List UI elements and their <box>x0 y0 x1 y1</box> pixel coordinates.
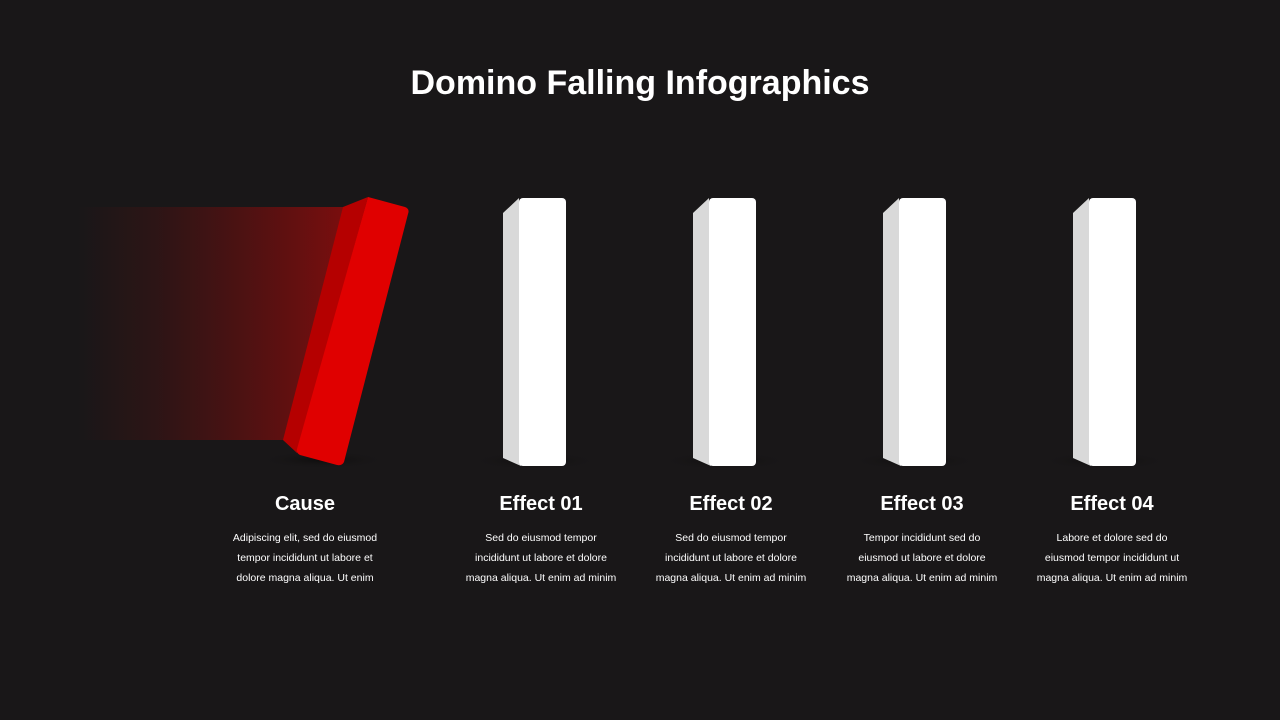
text: effect 02: Effect 02 <box>689 493 773 515</box>
text: effect 03: Effect 03 <box>880 493 964 515</box>
white domino 2 <box>660 198 790 470</box>
white domino 3 <box>850 198 980 470</box>
text: effect 04: Effect 04 <box>1070 493 1154 515</box>
text: effect 02 <box>656 493 806 584</box>
white domino 1 <box>470 198 600 470</box>
red falling domino <box>78 197 409 469</box>
text: effect 01 <box>466 493 616 584</box>
text: effect 02: magna aliqua. Ut enim ad minim <box>656 572 806 584</box>
text: cause: Cause <box>275 493 335 515</box>
text: effect 04 <box>1037 493 1187 584</box>
text: effect 01: Effect 01 <box>499 493 583 515</box>
text: cause: tempor incididunt ut labore et <box>237 552 373 564</box>
text: effect 02: incididunt ut labore et dolore <box>665 552 797 564</box>
text: effect 01: incididunt ut labore et dolore <box>475 552 607 564</box>
text: cause <box>232 493 377 584</box>
text: cause: dolore magna aliqua. Ut enim <box>236 572 374 584</box>
text: effect 03 <box>847 493 997 584</box>
text: effect 04: Labore et dolore sed do <box>1057 532 1167 544</box>
text: effect 01: Sed do eiusmod tempor <box>485 532 597 544</box>
text: effect 03: eiusmod ut labore et dolore <box>858 552 986 564</box>
white domino 4 <box>1040 198 1170 470</box>
text: effect 03: Tempor incididunt sed do <box>864 532 980 544</box>
text: effect 04: eiusmod tempor incididunt ut <box>1045 552 1179 564</box>
text: effect 01: magna aliqua. Ut enim ad minim <box>466 572 616 584</box>
text: effect 04: magna aliqua. Ut enim ad minim <box>1037 572 1187 584</box>
text: effect 03: magna aliqua. Ut enim ad minim <box>847 572 997 584</box>
text: effect 02: Sed do eiusmod tempor <box>675 532 787 544</box>
text: cause: Adipiscing elit, sed do eiusmod <box>233 532 377 544</box>
title: Domino Falling Infographics <box>410 64 870 102</box>
